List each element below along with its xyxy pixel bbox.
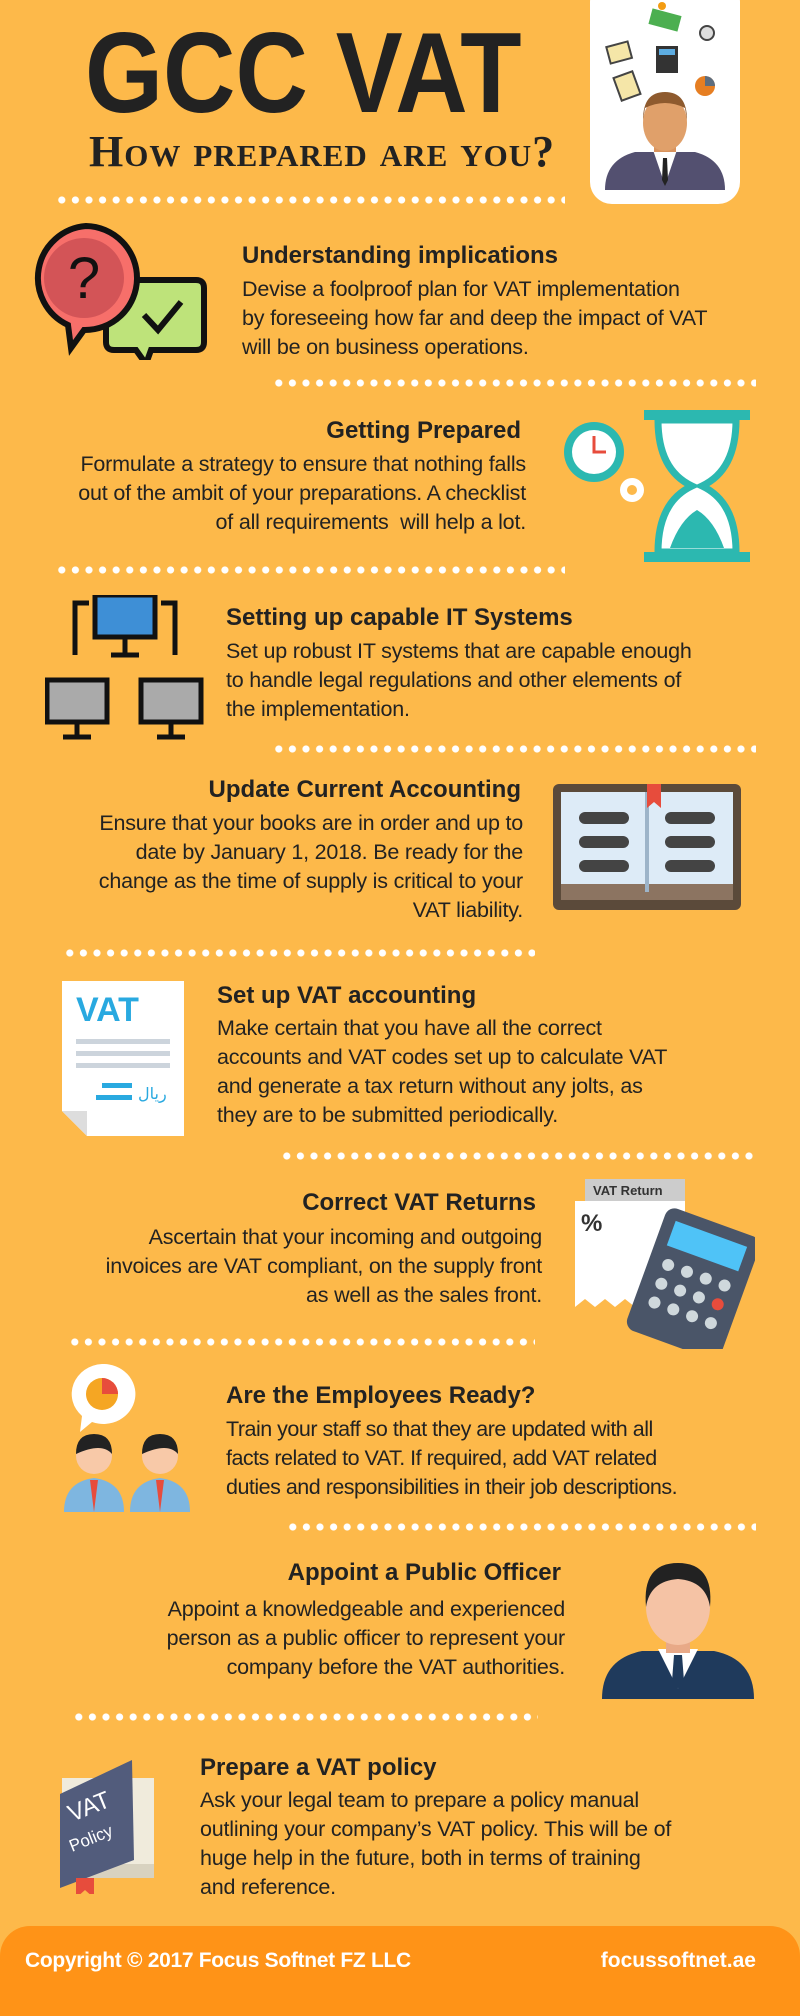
icon: VAT policy book: Policy — [66, 1821, 116, 1856]
text — [217, 1016, 667, 1127]
divider dots — [280, 1152, 756, 1160]
text: Make certain that you have all the correct — [217, 1016, 602, 1040]
text: Ensure that your books are in order and up to — [99, 811, 523, 835]
text: Appoint a knowledgeable and experienced — [168, 1597, 565, 1621]
icon: question and check speech bubbles — [34, 223, 207, 360]
text: Ask your legal team to prepare a policy manual — [200, 1788, 639, 1812]
title: GCC VAT — [85, 10, 522, 137]
text: duties and responsibilities in their job descriptions. — [226, 1475, 677, 1499]
text: out of the ambit of your preparations. A checklist — [78, 481, 526, 505]
icon: VAT document: ريال — [138, 1084, 167, 1104]
divider dots — [272, 745, 756, 753]
heading: Setting up capable IT Systems — [226, 604, 573, 631]
divider dots — [272, 379, 756, 387]
subtitle: How prepared are you? — [89, 127, 555, 176]
section 3 — [45, 595, 692, 740]
section 9 — [60, 1754, 672, 1899]
text — [242, 277, 707, 359]
text: date by January 1, 2018. Be ready for the — [136, 840, 523, 864]
text: outlining your company’s VAT policy. This will be of — [200, 1817, 671, 1841]
text: will be on business operations. — [242, 335, 529, 359]
text: Train your staff so that they are updated with all — [226, 1417, 653, 1441]
icon: open book — [553, 784, 741, 910]
section 4 — [99, 776, 741, 922]
divider dots — [63, 949, 535, 957]
text: the implementation. — [226, 697, 410, 721]
heading: Are the Employees Ready? — [226, 1382, 535, 1409]
text: facts related to VAT. If required, add VAT related — [226, 1446, 657, 1470]
text: by foreseeing how far and deep the impact of VAT — [242, 306, 707, 330]
text — [78, 452, 526, 534]
text: and reference. — [200, 1875, 336, 1899]
text: huge help in the future, both in terms of training — [200, 1846, 641, 1870]
icon: VAT document — [62, 981, 184, 1136]
icon: clock gears hourglass — [564, 410, 750, 562]
text: Devise a foolproof plan for VAT implementation — [242, 277, 680, 301]
text: change as the time of supply is critical to your — [99, 869, 523, 893]
text — [200, 1788, 672, 1899]
divider dots — [72, 1713, 538, 1721]
text: person as a public officer to represent your — [167, 1626, 565, 1650]
text: Formulate a strategy to ensure that nothing falls — [80, 452, 526, 476]
icon card: businessman — [590, 0, 740, 204]
website: focussoftnet.ae — [601, 1949, 756, 1972]
heading: Update Current Accounting — [209, 776, 521, 803]
text — [167, 1597, 565, 1679]
section 8 — [167, 1559, 754, 1699]
text — [99, 811, 523, 922]
icon: VAT document: VAT — [76, 991, 139, 1029]
icon: question and check speech bubbles: ? — [68, 246, 100, 311]
text: and generate a tax return without any jolts, as — [217, 1074, 643, 1098]
text: company before the VAT authorities. — [227, 1655, 565, 1679]
icon: VAT return calculator — [575, 1179, 755, 1349]
section 5 — [62, 981, 667, 1136]
divider dots — [55, 196, 565, 204]
icon: VAT return calculator: % — [581, 1210, 602, 1237]
text — [106, 1225, 542, 1307]
text — [226, 639, 692, 721]
copyright: Copyright © 2017 Focus Softnet FZ LLC — [25, 1949, 411, 1972]
text: Ascertain that your incoming and outgoing — [149, 1225, 542, 1249]
icon: employees — [64, 1364, 190, 1512]
text: VAT liability. — [413, 898, 523, 922]
text: accounts and VAT codes set up to calculate VAT — [217, 1045, 667, 1069]
text: invoices are VAT compliant, on the supply front — [106, 1254, 542, 1278]
heading: Getting Prepared — [326, 417, 521, 444]
section 2 — [78, 410, 750, 562]
divider dots — [68, 1338, 535, 1346]
text: they are to be submitted periodically. — [217, 1103, 558, 1127]
text — [226, 1417, 677, 1499]
text: as well as the sales front. — [306, 1283, 542, 1307]
divider dots — [286, 1523, 756, 1531]
section 7 — [64, 1364, 677, 1512]
icon: network of computers — [45, 595, 204, 740]
icon: VAT policy book: VAT — [64, 1786, 115, 1828]
divider dots — [55, 566, 565, 574]
icon: public officer — [602, 1563, 754, 1699]
section 6 — [106, 1179, 755, 1349]
heading: Set up VAT accounting — [217, 982, 476, 1009]
text: Set up robust IT systems that are capable enough — [226, 639, 692, 663]
icon: VAT policy book — [60, 1760, 154, 1894]
heading: Correct VAT Returns — [302, 1189, 536, 1216]
heading: Understanding implications — [242, 242, 558, 269]
icon: VAT return calculator: VAT Return — [593, 1183, 663, 1198]
heading: Prepare a VAT policy — [200, 1754, 437, 1781]
text: of all requirements will help a lot. — [216, 510, 526, 534]
section 1 — [34, 223, 707, 360]
heading: Appoint a Public Officer — [288, 1559, 561, 1586]
text: to handle legal regulations and other elements of — [226, 668, 681, 692]
footer — [0, 1926, 800, 2016]
